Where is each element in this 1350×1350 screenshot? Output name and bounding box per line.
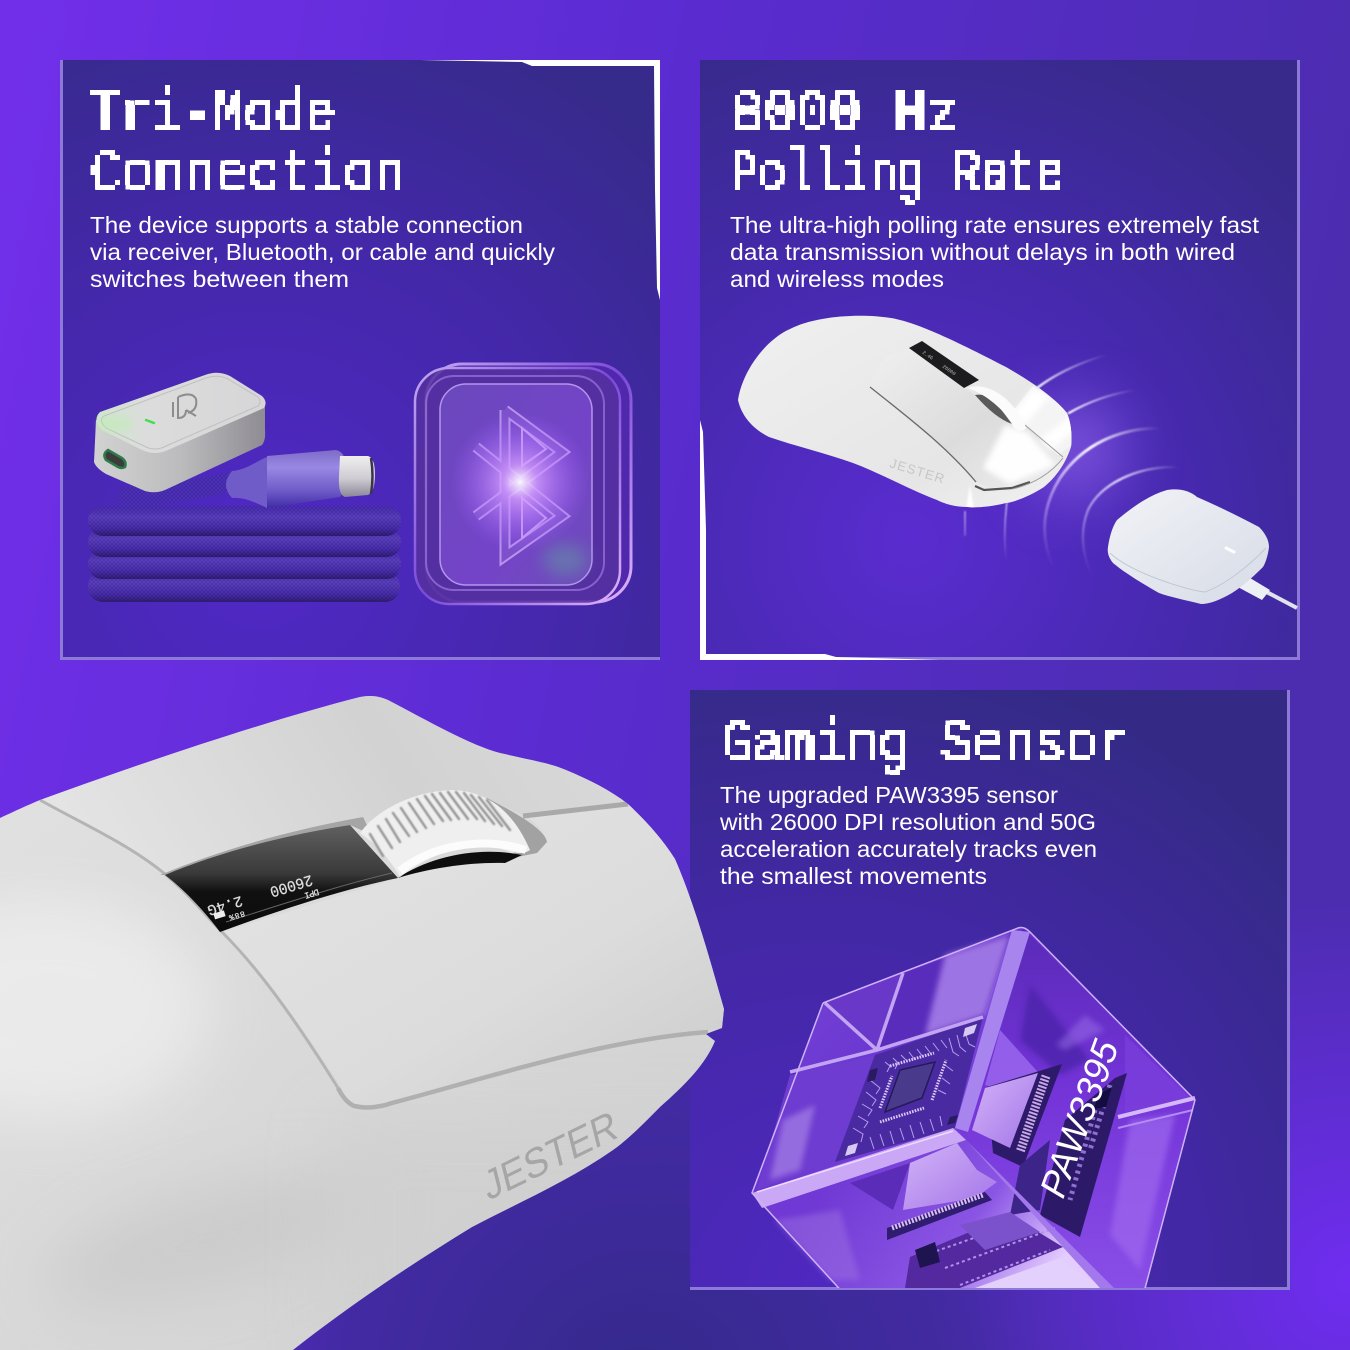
icon: wireless receiver with cable bbox=[1108, 489, 1297, 608]
sub: OLED display: 88% bbox=[228, 908, 246, 921]
icon: white wireless mouse: 26000 bbox=[941, 364, 957, 377]
icon: signal arcs bbox=[965, 355, 1178, 572]
text: connection description: switches between them bbox=[90, 266, 349, 292]
icon: white wireless mouse: 2.4G bbox=[921, 350, 934, 362]
heading: 8000 Hz Polling Rate: 8000 Hz bbox=[731, 82, 959, 150]
sub: OLED display: 26000 bbox=[267, 870, 315, 900]
panel: 8000 Hz polling rate bbox=[700, 60, 1300, 660]
text: connection description bbox=[90, 212, 556, 292]
text: sensor description bbox=[719, 782, 1097, 889]
text: sensor description: acceleration accurately tracks even bbox=[720, 836, 1097, 862]
label: PAW3395: PAW3395 bbox=[1032, 1034, 1127, 1203]
sub: lower chip bbox=[887, 1143, 1063, 1288]
text: sensor description: The upgraded PAW3395 sensor bbox=[720, 782, 1058, 808]
heading: Gaming Sensor: Gaming Sensor bbox=[721, 712, 1129, 780]
icon: braided cable coil bbox=[88, 480, 401, 602]
heading: Tri-Mode Connection bbox=[90, 82, 406, 210]
panel: gaming sensor bbox=[690, 690, 1290, 1296]
sub: left click button bbox=[628, 804, 724, 1026]
sub: glass bevels bbox=[752, 928, 1195, 1296]
text: connection description: via receiver, Bluetooth, or cable and quickly bbox=[90, 239, 556, 265]
icon: glass Bluetooth tile bbox=[415, 364, 631, 604]
sub: rear shell bbox=[40, 696, 628, 805]
text: sensor description: the smallest movements bbox=[720, 863, 987, 889]
text: polling rate description bbox=[730, 212, 1260, 292]
label: JESTER on small mouse: JESTER bbox=[888, 456, 946, 486]
sub: OLED display: 2.4G bbox=[205, 891, 245, 918]
sub: PCB on left face bbox=[835, 1017, 983, 1162]
icon: USB receiver dongle bbox=[94, 373, 266, 492]
icon: Bluetooth rune bbox=[476, 410, 562, 556]
sub: OLED display bbox=[160, 817, 398, 932]
heading: 8000 Hz Polling Rate bbox=[730, 82, 1064, 210]
heading: 8000 Hz Polling Rate: Polling Rate bbox=[730, 142, 1064, 210]
icon: white wireless mouse bbox=[730, 310, 1075, 510]
text: sensor description: with 26000 DPI resolution and 50G bbox=[719, 809, 1096, 835]
icon: glass cube with sensor chip bbox=[752, 928, 1195, 1296]
text: polling rate description: The ultra-high polling rate ensures extremely fast bbox=[730, 212, 1260, 238]
sub: JESTER logo: JESTER bbox=[479, 1101, 621, 1210]
sub: reflected cells bbox=[757, 935, 1190, 1280]
large white mouse closeup bbox=[0, 690, 740, 1350]
text: polling rate description: data transmission without delays in both wired bbox=[730, 239, 1235, 265]
icon: USB-C connector bbox=[226, 450, 375, 508]
panel: tri-mode connection bbox=[60, 60, 660, 660]
heading: Tri-Mode Connection: Tri-Mode bbox=[90, 82, 336, 150]
sub: OLED display: DPI bbox=[303, 886, 320, 900]
sub: sensor chip on right bbox=[972, 1064, 1127, 1237]
text: polling rate description: and wireless modes bbox=[730, 266, 944, 292]
text: connection description: The device supports a stable connection bbox=[90, 212, 523, 238]
sub: scroll wheel bbox=[360, 790, 547, 878]
heading: Tri-Mode Connection: Connection bbox=[90, 142, 406, 210]
